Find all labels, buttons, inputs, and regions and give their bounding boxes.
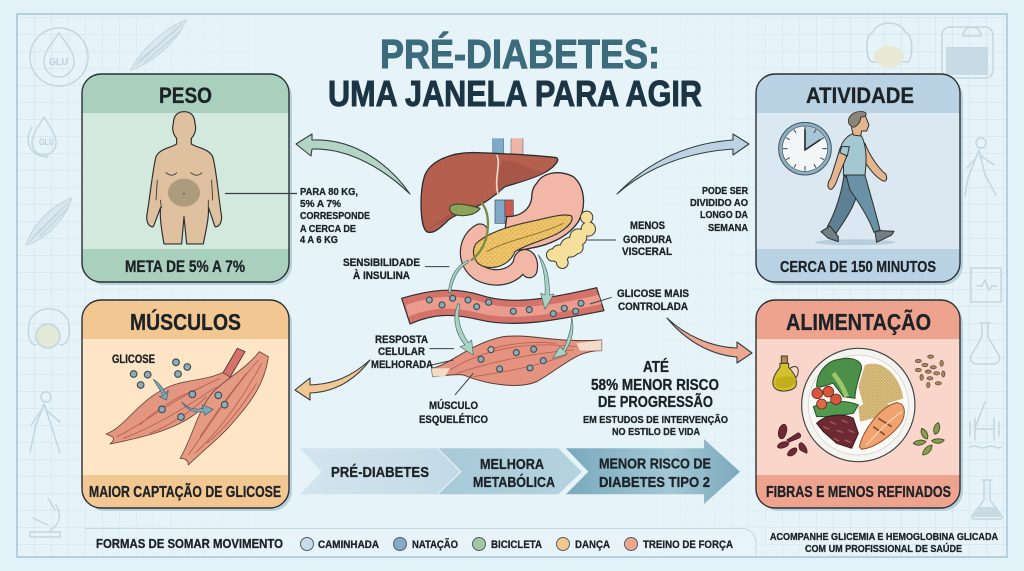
panel: músculos xyxy=(82,300,292,511)
labels: central illustration: GLICOSE MAIS xyxy=(617,288,689,300)
icon: gallbladder xyxy=(450,204,480,216)
heading: músculos: MÚSCULOS xyxy=(130,308,241,335)
callout: atividade note: LONGO DA xyxy=(700,209,748,221)
caption: fibras: FIBRAS E MENOS REFINADOS xyxy=(766,484,951,501)
callout: 58% risk reduction: ATÉ xyxy=(643,359,669,376)
central illustration: organs xyxy=(402,138,616,395)
arrow: to peso xyxy=(296,134,410,194)
labels: central illustration: RESPOSTA xyxy=(375,334,428,346)
icon: human body with abdominal fat xyxy=(147,112,222,244)
legend bar xyxy=(85,528,756,556)
callout: atividade note: PODE SER xyxy=(702,185,748,197)
step: menor risco de diabetes tipo 2 xyxy=(566,439,740,504)
heading: alimentação: ALIMENTAÇÃO xyxy=(786,308,931,335)
labels: central illustration: MENOS xyxy=(630,220,665,232)
step: pré-diabetes: PRÉ-DIABETES xyxy=(331,464,429,481)
labels: central illustration: SENSIBILIDADE xyxy=(343,257,420,269)
labels: central illustration: CONTROLADA xyxy=(618,301,688,313)
icon: blood vessels xyxy=(493,138,523,223)
icon: liver xyxy=(421,153,558,232)
legend item: bicicleta xyxy=(472,538,542,551)
callout: atividade note: SEMANA xyxy=(708,222,748,234)
labels: central illustration: GORDURA xyxy=(623,234,672,246)
panel: atividade xyxy=(756,74,963,285)
callout: peso note: 4 A 6 KG xyxy=(300,234,338,246)
arrow: to atividade xyxy=(617,134,749,194)
callout: peso note: CORRESPONDE xyxy=(300,210,370,222)
labels: central illustration: MÚSCULO xyxy=(429,399,478,412)
legend item: natação: NATAÇÃO xyxy=(412,538,458,551)
callout: 58% risk reduction: EM ESTUDOS DE INTERVENÇÃO xyxy=(583,413,728,426)
heading: peso: PESO xyxy=(159,83,212,108)
label: glicose: GLICOSE xyxy=(112,354,155,366)
legend item: treino de força: TREINO DE FORÇA xyxy=(643,539,733,551)
callout: 58% risk reduction: 58% MENOR RISCO xyxy=(591,377,719,394)
legend item: caminhada xyxy=(300,538,379,551)
labels: central illustration: CELULAR xyxy=(378,346,425,358)
arrow: to músculos xyxy=(295,360,370,400)
callout: peso note: PARA 80 KG, xyxy=(300,186,358,198)
legend item: dança: DANÇA xyxy=(575,539,610,551)
footer note xyxy=(770,531,998,555)
panel: alimentação xyxy=(756,300,963,511)
callout: peso note xyxy=(225,186,370,246)
step: pré-diabetes xyxy=(300,448,460,494)
step: melhora metabólica: METABÓLICA xyxy=(473,473,555,491)
icon: clock xyxy=(779,122,831,175)
step: menor risco de diabetes tipo 2: MENOR RISCO DE xyxy=(599,456,711,472)
icon: duodenum xyxy=(468,232,530,277)
legend item: dança xyxy=(556,538,610,551)
legend item: caminhada: CAMINHADA xyxy=(318,539,379,551)
leader lines xyxy=(425,240,616,395)
labels: central illustration: MELHORADA xyxy=(371,359,433,371)
title: PRÉ-DIABETES: xyxy=(380,31,660,77)
icon: stomach xyxy=(503,173,584,250)
icon: blood vessel with glucose xyxy=(402,288,604,324)
caption: captação: MAIOR CAPTAÇÃO DE GLICOSE xyxy=(89,481,281,501)
title xyxy=(328,31,702,114)
callout: 58% risk reduction: NO ESTILO DE VIDA xyxy=(612,426,700,438)
background icons: GLU xyxy=(39,137,54,147)
legend item: treino de força xyxy=(624,538,733,551)
labels: central illustration: À INSULINA xyxy=(353,269,410,282)
illustration: plate of food xyxy=(773,348,945,462)
icon: skeletal muscle xyxy=(432,336,602,385)
background icons: GLU xyxy=(49,57,68,68)
callout: peso note: 5% A 7% xyxy=(300,198,342,210)
icon: walking man xyxy=(815,112,895,245)
callout: atividade note xyxy=(690,185,748,234)
icon: visceral fat xyxy=(546,211,596,269)
labels: central illustration: ESQUELÉTICO xyxy=(419,413,488,426)
legend item: bicicleta: BICICLETA xyxy=(491,539,542,551)
panel: peso xyxy=(82,74,292,285)
callout: atividade note: DIVIDIDO AO xyxy=(690,197,748,209)
illustration: muscle with glucose xyxy=(106,348,268,465)
arrow: to alimentação xyxy=(667,318,752,363)
legend title: FORMAS DE SOMAR MOVIMENTO xyxy=(96,536,283,551)
progress chain xyxy=(300,439,740,504)
footer note: COM UM PROFISSIONAL DE SAÚDE xyxy=(805,542,962,555)
caption: cerca de 150 minutos: CERCA DE 150 MINUTOS xyxy=(780,259,936,276)
callout: peso note: A CERCA DE xyxy=(300,223,356,235)
callout: 58% risk reduction: DE PROGRESSÃO xyxy=(598,393,713,411)
labels: central illustration: VISCERAL xyxy=(622,246,672,258)
callout: 58% risk reduction xyxy=(583,359,728,438)
step: menor risco de diabetes tipo 2: DIABETES TIPO 2 xyxy=(599,474,710,491)
heading: atividade: ATIVIDADE xyxy=(806,83,914,108)
title: UMA JANELA PARA AGIR xyxy=(328,73,702,114)
caption: meta: META DE 5% A 7% xyxy=(125,258,245,276)
labels: central illustration xyxy=(343,220,689,426)
step: melhora metabólica xyxy=(438,448,582,494)
step: melhora metabólica: MELHORA xyxy=(480,456,544,473)
icon: pancreas xyxy=(474,215,572,268)
arrows: glucose flow xyxy=(448,255,573,358)
legend item: natação xyxy=(394,538,458,551)
